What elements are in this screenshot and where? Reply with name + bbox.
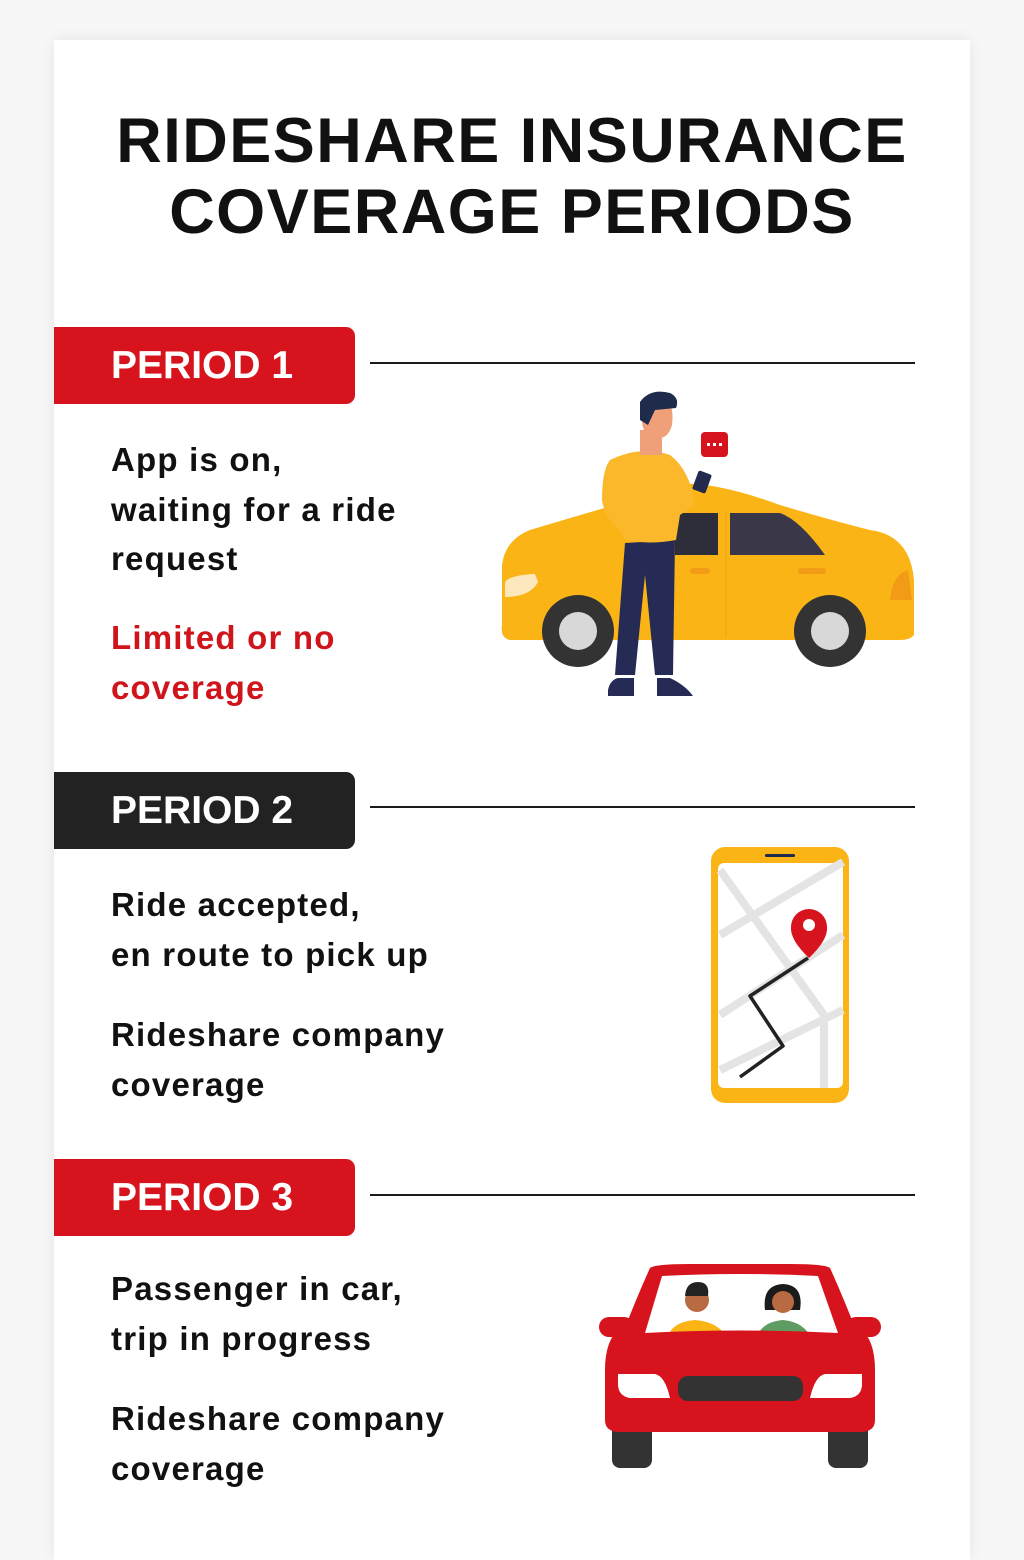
title bbox=[116, 106, 908, 247]
text: period 1 description bbox=[110, 441, 397, 577]
badge: period 2 bbox=[54, 772, 355, 849]
badge: period 3: PERIOD 3 bbox=[111, 1176, 293, 1219]
text: period 1 coverage bbox=[111, 619, 336, 706]
text: period 1 description: App is on, bbox=[111, 441, 282, 478]
text: period 2 coverage bbox=[111, 1016, 445, 1103]
text: period 2 coverage: coverage bbox=[111, 1066, 266, 1102]
text: period 1 coverage: Limited or no bbox=[111, 619, 336, 656]
badge: period 2: PERIOD 2 bbox=[111, 789, 293, 832]
text: period 1 description: request bbox=[111, 540, 239, 577]
text: period 2 description bbox=[111, 886, 429, 973]
badge: period 3 bbox=[54, 1159, 355, 1236]
text: period 1 description: waiting for a ride bbox=[111, 490, 397, 528]
illustration: red car front with passengers bbox=[599, 1264, 881, 1468]
badge: period 1: PERIOD 1 bbox=[111, 344, 293, 387]
icon: phone with map bbox=[711, 847, 849, 1103]
text: period 3 coverage: Rideshare company bbox=[111, 1400, 445, 1437]
illustration: man with yellow car bbox=[502, 392, 914, 696]
text: period 2 coverage: Rideshare company bbox=[111, 1016, 445, 1053]
title: COVERAGE PERIODS bbox=[169, 177, 855, 247]
text: period 3 description: trip in progress bbox=[111, 1320, 372, 1356]
badge: period 1 bbox=[54, 327, 355, 404]
text: period 3 coverage bbox=[111, 1400, 445, 1487]
text: period 3 description: Passenger in car, bbox=[111, 1270, 403, 1307]
title: RIDESHARE INSURANCE bbox=[116, 106, 908, 176]
text: period 2 description: en route to pick up bbox=[111, 936, 429, 972]
text: period 1 coverage: coverage bbox=[111, 668, 266, 706]
text: period 3 coverage: coverage bbox=[111, 1450, 266, 1486]
text: period 2 description: Ride accepted, bbox=[111, 886, 361, 923]
text: period 3 description bbox=[111, 1270, 403, 1357]
